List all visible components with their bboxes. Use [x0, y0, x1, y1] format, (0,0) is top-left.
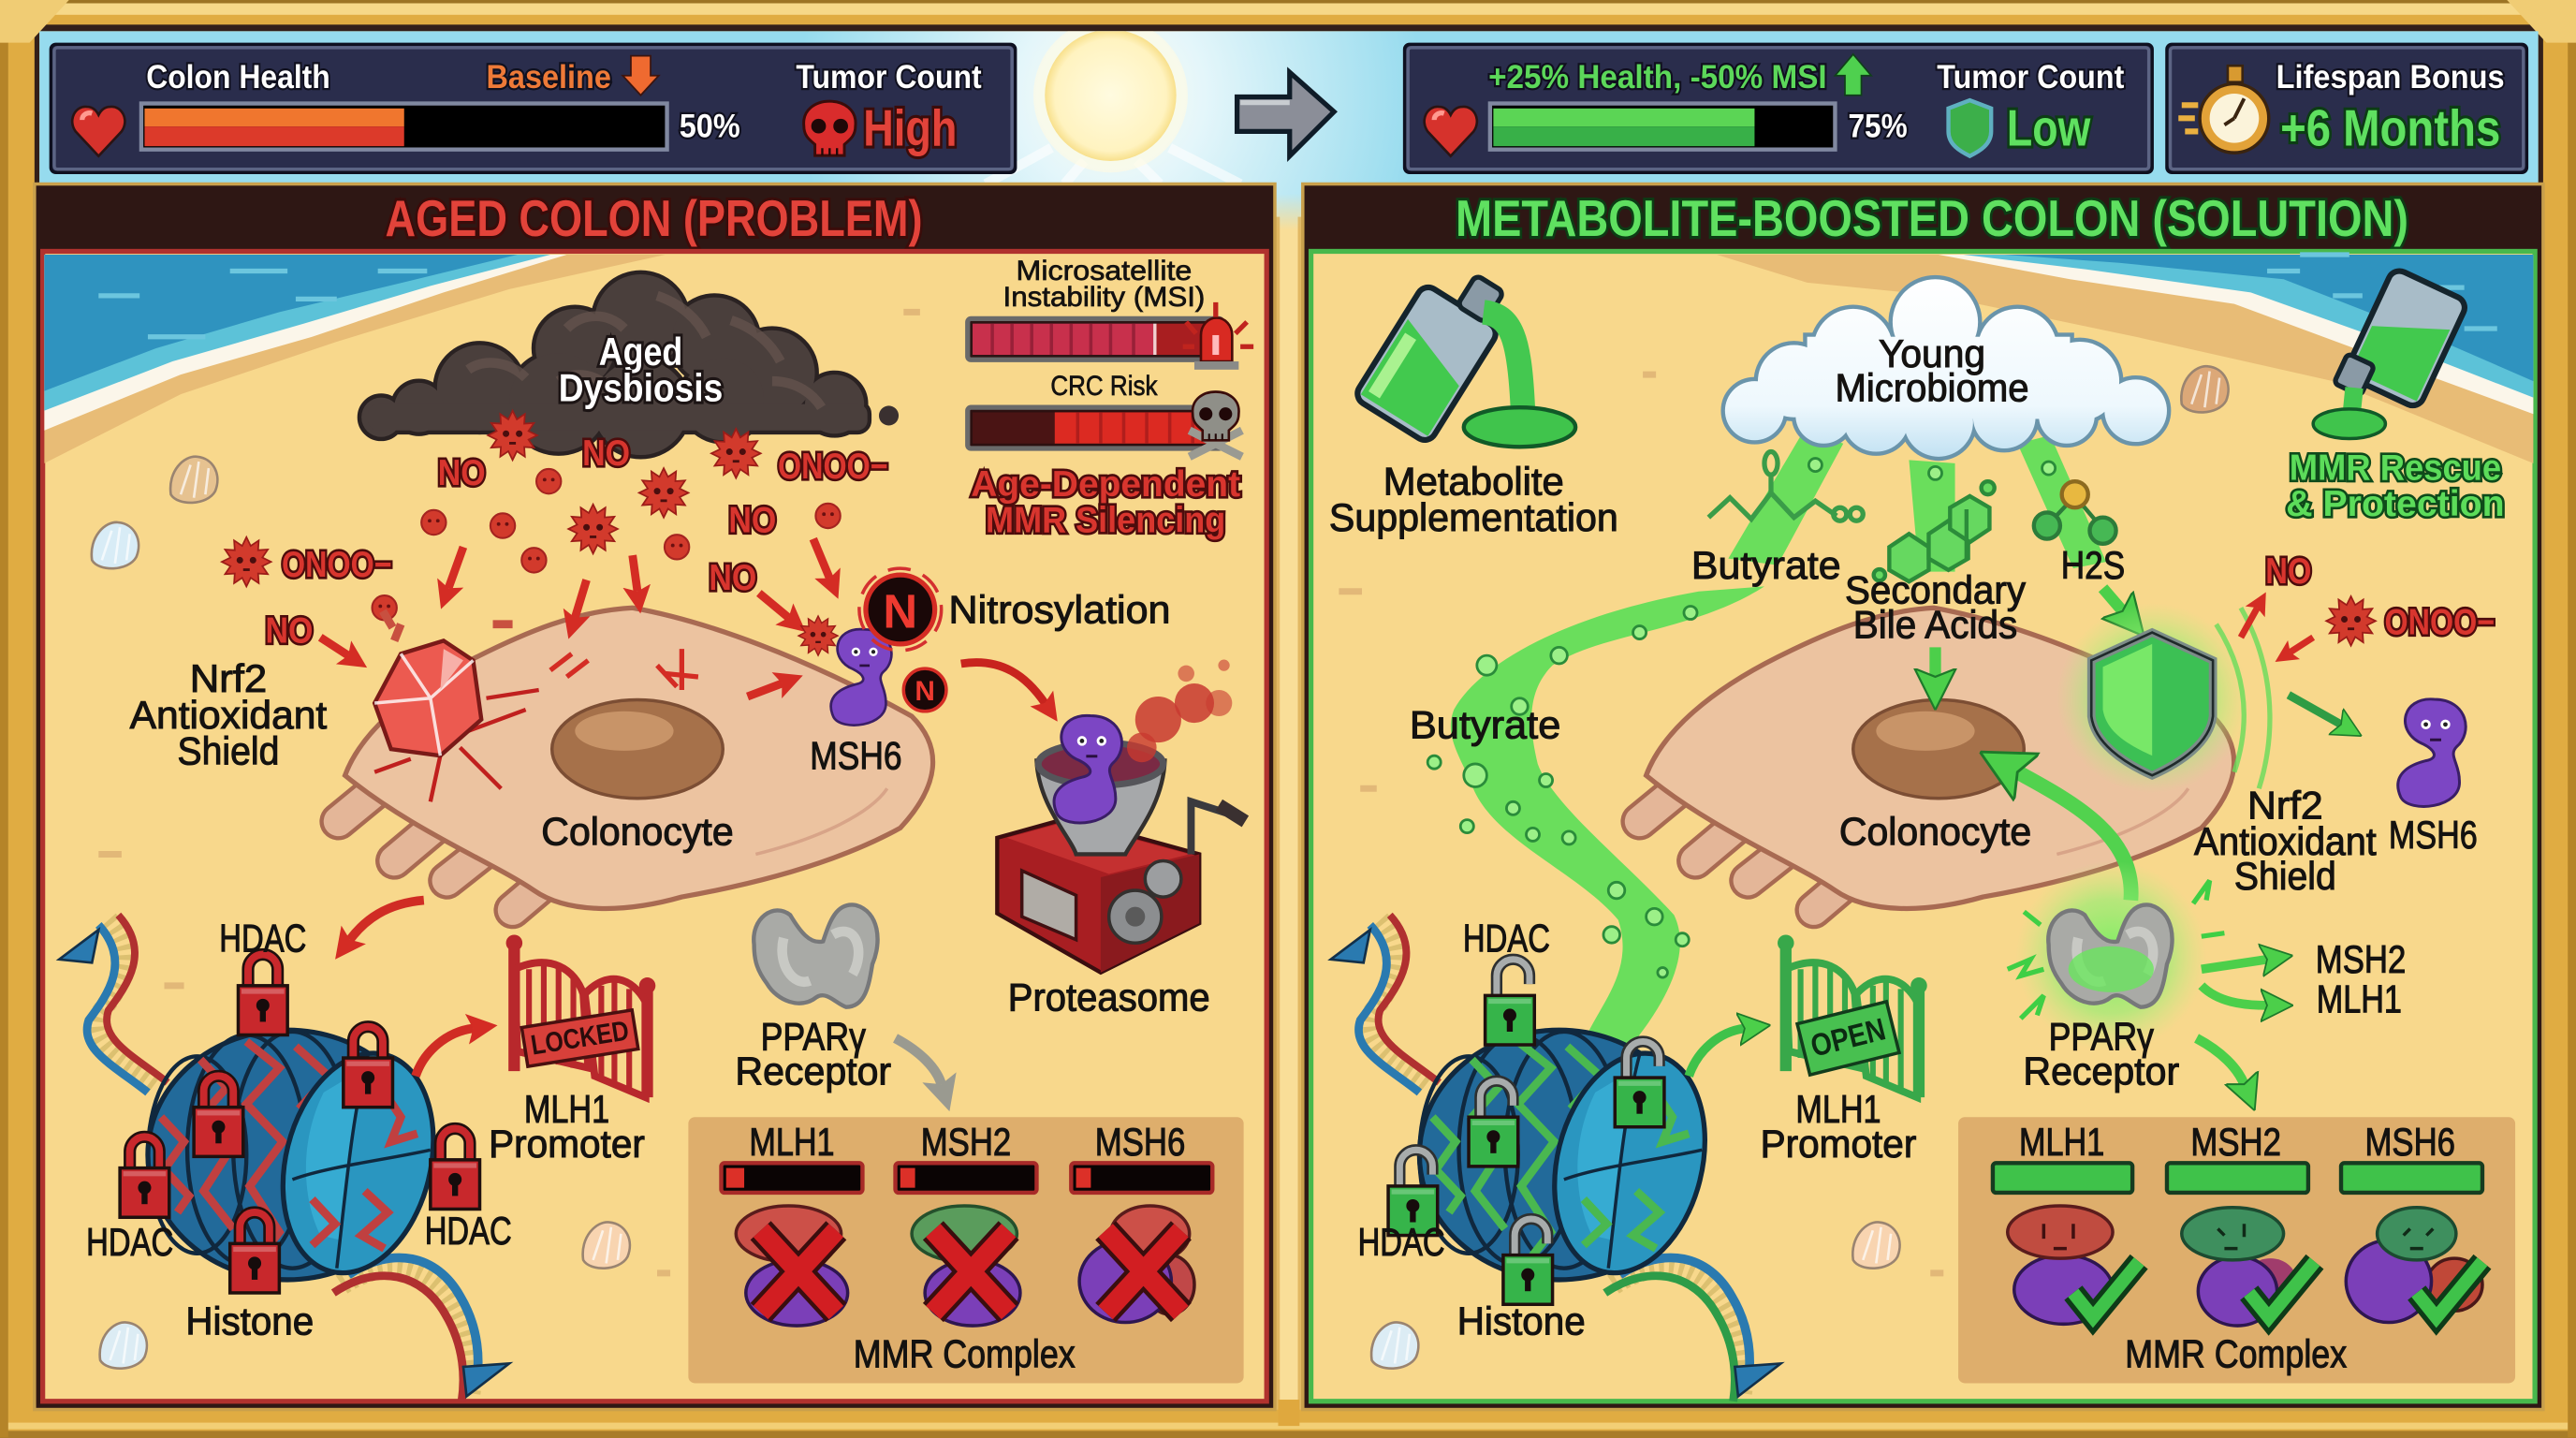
labels: metabolites: H2S	[2061, 543, 2125, 587]
icon: activated PPARγ receptor	[2008, 860, 2224, 1051]
callout: MMR rescue and protection: & Protection	[2286, 484, 2505, 524]
icon: glowing shield	[2056, 603, 2270, 794]
label: PPARγ receptor: Receptor	[735, 1049, 891, 1093]
complex: MSH2 failed	[912, 1206, 1020, 1326]
arrow: histone to promoter	[416, 1028, 473, 1076]
icon: N badge large	[859, 568, 942, 651]
label: MMR complex: MMR Complex	[2125, 1331, 2347, 1375]
label: tumor count: Tumor Count	[1937, 59, 2125, 95]
label: MLH1 promoter	[1761, 1087, 1916, 1166]
cloud: aged dysbiosis	[361, 274, 899, 455]
panel: metabolite-boosted colon (solution)	[1303, 184, 2543, 1410]
label: microsatellite instability	[1003, 256, 1205, 313]
label: Nrf2 antioxidant shield: Nrf2	[190, 656, 267, 700]
bar: CRC risk	[968, 407, 1222, 448]
labels: metabolites: Butyrate	[1410, 702, 1560, 746]
arrow: receptor to MMR complex	[896, 1038, 942, 1084]
bars and labels: MSH6	[1095, 1120, 1185, 1164]
title: metabolite-boosted colon: METABOLITE-BOOSTED COLON (SOLUTION)	[1456, 190, 2408, 247]
panel: MMR complex (restored)	[1958, 1117, 2515, 1383]
arrows: receptor to MSH2 and MLH1	[2202, 960, 2267, 1005]
callout: MMR rescue and protection: MMR Rescue	[2290, 448, 2501, 489]
icon: heart	[1425, 107, 1477, 156]
damage marks	[550, 649, 698, 690]
label: lifespan bonus: Lifespan Bonus	[2276, 59, 2505, 95]
arrows: deflected	[2241, 608, 2313, 653]
red smoke	[1127, 660, 1232, 762]
label: MLH1 promoter: Promoter	[1761, 1122, 1916, 1166]
value: low: Low	[2007, 99, 2091, 156]
arrow: before to after	[1237, 72, 1334, 156]
complex: MSH6 failed	[1079, 1206, 1194, 1323]
label: MSH6: MSH6	[2389, 813, 2478, 857]
icon: skull and crossbones	[1190, 392, 1242, 457]
labels: HDAC and histone: HDAC	[1358, 1220, 1445, 1264]
icons: red HDAC locks	[120, 954, 479, 1293]
label: Nrf2 antioxidant shield: Shield	[178, 728, 279, 772]
labels: NO and ONOO-: NO	[709, 558, 756, 598]
icon: heart	[72, 107, 124, 156]
value: 50%: 50%	[680, 109, 740, 145]
bar: MSI	[968, 318, 1222, 360]
streams: green metabolites	[1451, 431, 2106, 1051]
label: MSH6: MSH6	[810, 734, 902, 778]
bubbles in streams	[1427, 459, 2056, 977]
bars and labels: MLH1	[2019, 1120, 2104, 1164]
icon: bile acid molecule	[1874, 481, 1995, 581]
icon: butyrate molecule	[1708, 452, 1863, 521]
icons: green open locks	[1388, 960, 1664, 1304]
arrow: receptor to nucleus	[2017, 772, 2131, 901]
label: MLH1 promoter: Promoter	[489, 1122, 645, 1166]
labels: HDAC and histone: Histone	[185, 1299, 314, 1343]
bars and labels: MSH2	[2190, 1120, 2281, 1164]
arrow: bile acids to nucleus	[1932, 647, 1939, 677]
label: nitrosylation: Nitrosylation	[949, 588, 1171, 632]
label: PPARγ receptor	[735, 1015, 891, 1093]
callout: age-dependent MMR silencing: Age-Dependent	[971, 464, 1240, 505]
value: high: High	[863, 99, 957, 156]
sign: open	[1797, 1002, 1899, 1075]
label: young microbiome	[1835, 331, 2029, 410]
label: microsatellite instability: Microsatellite	[1017, 256, 1192, 286]
label: colonocyte: Colonocyte	[1839, 809, 2031, 853]
labels: HDAC and histone: HDAC	[425, 1209, 512, 1253]
HUD panel: lifespan bonus	[2167, 44, 2526, 172]
value: +6 months: +6 Months	[2280, 99, 2500, 156]
icon: N badge small: N	[915, 676, 935, 707]
label: Nrf2 antioxidant shield: Antioxidant	[130, 693, 328, 737]
label: colon health: Colon Health	[146, 59, 330, 95]
label: microsatellite instability: Instability (MSI)	[1003, 282, 1205, 313]
nucleus	[1853, 700, 2024, 799]
nucleus	[552, 700, 723, 799]
labels: HDAC and histone: HDAC	[1463, 916, 1550, 960]
label: metabolite supplementation: Metabolite	[1383, 460, 1564, 504]
arrow: shield to MSH6	[2289, 695, 2341, 725]
icon: siren	[1183, 302, 1253, 370]
icon: radical	[2326, 596, 2376, 646]
arrows: radicals falling on the cell	[320, 539, 829, 697]
labels: HDAC and histone: HDAC	[219, 916, 306, 960]
icon: MSH6 protein	[831, 629, 891, 726]
callout: MMR rescue and protection	[2286, 448, 2505, 524]
sand background	[43, 251, 1266, 1401]
labels: metabolites: Butyrate	[1691, 543, 1841, 587]
label: baseline: Baseline	[487, 59, 611, 95]
labels: NO and ONOO-: ONOO−	[282, 545, 392, 585]
label: PPARγ receptor: Receptor	[2023, 1049, 2179, 1093]
cell: colonocyte	[339, 608, 933, 910]
label: tumor count: Tumor Count	[796, 59, 982, 95]
icon: histone	[1419, 1030, 1727, 1289]
label: Nrf2 antioxidant shield	[130, 656, 328, 772]
labels: MSH2 and MLH1: MSH2	[2316, 937, 2406, 981]
radicals blocked	[2241, 551, 2495, 653]
arrow: receptor to MMR complex	[2197, 1038, 2244, 1084]
icon: green shield	[1949, 100, 1991, 156]
labels: NO and ONOO-: NO	[728, 501, 776, 541]
icon: sun	[986, 18, 1240, 184]
label: Nrf2 antioxidant shield: Antioxidant	[2194, 819, 2377, 863]
cloud: young microbiome	[1725, 279, 2167, 457]
label: metabolite supplementation: Supplementation	[1329, 495, 1618, 539]
label: MLH1 promoter	[489, 1087, 645, 1166]
labels: NO and ONOO-: ONOO−	[778, 447, 888, 487]
arrow: histone to promoter	[1689, 1028, 1745, 1076]
label: aged dysbiosis: Aged	[599, 330, 682, 374]
HUD panel: boosted stats	[1405, 44, 2152, 172]
panel: MMR complex (failed)	[688, 1117, 1244, 1383]
labels: metabolites	[1410, 543, 2125, 746]
icon: inactive PPARγ receptor	[754, 904, 878, 1007]
labels: HDAC and histone: HDAC	[86, 1220, 173, 1264]
label: MLH1 promoter: MLH1	[1795, 1087, 1881, 1131]
labels: MSH2 and MLH1: MLH1	[2317, 976, 2402, 1020]
complex: MSH2 restored	[2182, 1208, 2315, 1326]
bars and labels: MSH6	[2364, 1120, 2455, 1164]
label: young microbiome: Young	[1879, 331, 1985, 375]
icon: stopwatch	[2178, 66, 2269, 153]
icon: H2S molecule	[2034, 481, 2116, 544]
bars and labels: MSH2	[921, 1120, 1011, 1164]
panel: aged colon (problem)	[35, 184, 1275, 1410]
labels: MSH2 and MLH1	[2316, 937, 2406, 1020]
gate: open MLH1 promoter	[1778, 934, 1927, 1097]
labels: NO and ONOO-: NO	[582, 433, 630, 474]
title: aged colon: AGED COLON (PROBLEM)	[386, 190, 922, 247]
labels: NO and ONOO-: NO	[265, 610, 313, 651]
label: PPARγ receptor: PPARγ	[761, 1015, 866, 1059]
label: aged dysbiosis	[559, 330, 723, 410]
bars and labels	[1993, 1120, 2482, 1193]
label: young microbiome: Microbiome	[1835, 366, 2029, 410]
icon: histone	[148, 1030, 455, 1289]
label: MMR complex: MMR Complex	[854, 1331, 1076, 1375]
sign: locked: LOCKED	[529, 1015, 631, 1062]
gauge: MSI	[968, 256, 1253, 370]
arrow: cell to HDAC	[350, 901, 424, 940]
icon: up arrow	[1835, 54, 1871, 95]
label: MLH1 promoter: MLH1	[524, 1087, 609, 1131]
icon: DNA strand	[1331, 915, 1781, 1401]
labels: metabolites: Bile Acids	[1853, 602, 2017, 646]
sign: open: OPEN	[1808, 1012, 1889, 1064]
label: Nrf2 antioxidant shield: Shield	[2234, 854, 2336, 898]
labels: metabolites: Secondary	[1845, 567, 2026, 611]
callout: age-dependent MMR silencing: MMR Silencing	[986, 501, 1225, 541]
icon: N badge large: N	[883, 584, 917, 638]
labels: NO and ONOO-: NO	[438, 453, 486, 493]
health bar 75%	[1490, 104, 1835, 150]
icon: red skull	[804, 101, 856, 155]
nucleosome with DNA	[1331, 915, 1781, 1401]
nucleosome with DNA	[59, 915, 509, 1401]
label: PPARγ receptor: PPARγ	[2049, 1015, 2154, 1059]
label: health and MSI gain: +25% Health, -50% MSI	[1488, 59, 1827, 95]
complex: MLH1 failed	[736, 1206, 848, 1326]
value: 75%: 75%	[1848, 109, 1908, 145]
frame: bottom joint	[1278, 1400, 1299, 1426]
label: metabolite supplementation	[1329, 460, 1618, 539]
beach: ocean	[44, 255, 666, 463]
arrow: H2S to shield	[2103, 588, 2123, 611]
icon: healthy MSH6	[2398, 699, 2466, 806]
beach: shells and pebbles	[1339, 366, 2492, 1369]
label: NO: NO	[2265, 551, 2311, 592]
icon: N badge small	[903, 668, 946, 712]
bars and labels	[721, 1120, 1212, 1193]
gate: locked MLH1 promoter	[506, 934, 655, 1097]
label: Nrf2 antioxidant shield	[2194, 783, 2377, 898]
label: CRC risk: CRC Risk	[1050, 371, 1158, 402]
bars and labels: MLH1	[749, 1120, 835, 1164]
radicals: virus particles	[222, 411, 841, 620]
beach: shells and pebbles	[92, 312, 1232, 1369]
cell: healthy colonocyte	[1640, 608, 2234, 910]
complex: MLH1 restored	[2008, 1206, 2139, 1324]
icon: metabolite bottle pouring	[1354, 275, 1575, 447]
label: aged dysbiosis: Dysbiosis	[559, 366, 723, 410]
icon: broken Nrf2 shield	[374, 611, 539, 801]
label: Nrf2 antioxidant shield: Nrf2	[2247, 783, 2323, 827]
label: PPARγ receptor	[2023, 1015, 2179, 1093]
label: colonocyte: Colonocyte	[541, 809, 734, 853]
icon: MSH6 in grinder	[1054, 715, 1122, 823]
complex: MSH6 restored	[2346, 1208, 2482, 1323]
HUD panel: baseline stats	[51, 44, 1016, 172]
sand background	[1311, 251, 2535, 1401]
label: ONOO-: ONOO−	[2385, 603, 2495, 643]
labels: HDAC and histone	[1358, 916, 1586, 1343]
label: proteasome: Proteasome	[1008, 976, 1210, 1020]
labels: HDAC and histone: Histone	[1457, 1299, 1586, 1343]
MSH6 with nitrosylation	[798, 568, 1171, 778]
icon: right bottle	[2313, 268, 2468, 439]
gauge: CRC risk	[968, 371, 1242, 457]
health bar 50%	[141, 104, 667, 150]
proteasome grinder	[997, 660, 1245, 973]
callout: age-dependent MMR silencing	[971, 464, 1240, 541]
labels: NO and ONOO-	[265, 433, 888, 651]
icon: down arrow	[622, 56, 659, 95]
beach: ocean	[1717, 255, 2533, 463]
icon: DNA strand	[59, 915, 509, 1401]
arrow: to proteasome	[961, 663, 1045, 703]
labels: HDAC and histone	[86, 916, 512, 1343]
